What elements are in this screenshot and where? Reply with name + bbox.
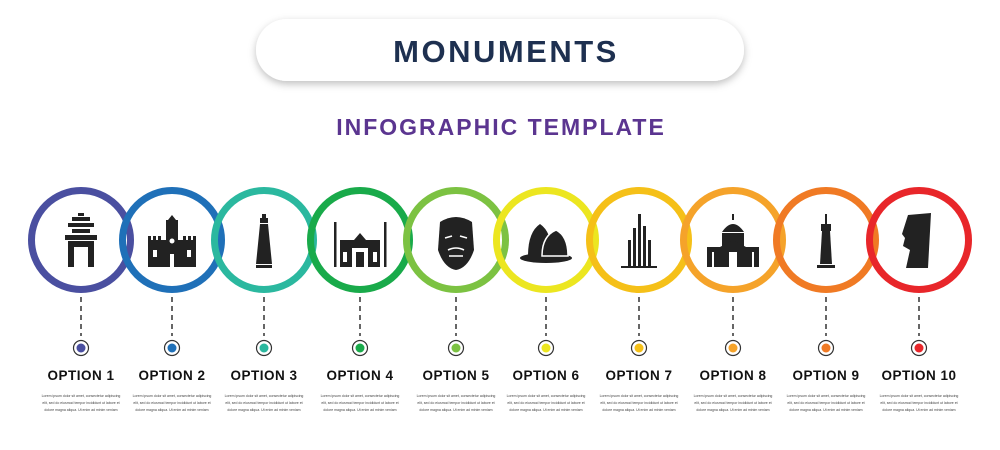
icon 4: mosque: [334, 222, 386, 267]
icon 7: towers: [621, 214, 657, 268]
descriptions: Lorem ipsum dolor sit amet, consectetur adipiscing: [133, 394, 211, 398]
descriptions: dolore magna aliqua. Ut enim ad minim veniam: [509, 408, 583, 412]
option labels: OPTION 4: [326, 368, 394, 383]
title pill: MONUMENTS: [393, 34, 619, 69]
descriptions: Lorem ipsum dolor sit amet, consectetur adipiscing: [787, 394, 865, 398]
descriptions: Lorem ipsum dolor sit amet, consectetur adipiscing: [417, 394, 495, 398]
descriptions: dolore magna aliqua. Ut enim ad minim veniam: [227, 408, 301, 412]
title pill: [256, 19, 744, 81]
descriptions: dolore magna aliqua. Ut enim ad minim veniam: [323, 408, 397, 412]
icon 6: mountains: [520, 224, 572, 263]
option labels: OPTION 7: [605, 368, 673, 383]
descriptions: Lorem ipsum dolor sit amet, consectetur adipiscing: [880, 394, 958, 398]
descriptions: dolore magna aliqua. Ut enim ad minim veniam: [882, 408, 956, 412]
icon 1: pagoda gate: [65, 213, 97, 267]
descriptions: dolore magna aliqua. Ut enim ad minim veniam: [419, 408, 493, 412]
descriptions: elit, sed do eiusmod tempor incididunt ut labore et: [321, 401, 399, 405]
descriptions: dolore magna aliqua. Ut enim ad minim veniam: [44, 408, 118, 412]
icon 5: mask: [438, 217, 474, 270]
icon 9: cn tower: [817, 214, 835, 268]
descriptions: elit, sed do eiusmod tempor incididunt ut labore et: [787, 401, 865, 405]
descriptions: elit, sed do eiusmod tempor incididunt ut labore et: [694, 401, 772, 405]
descriptions: Lorem ipsum dolor sit amet, consectetur adipiscing: [225, 394, 303, 398]
descriptions: elit, sed do eiusmod tempor incididunt ut labore et: [133, 401, 211, 405]
option labels: OPTION 1: [47, 368, 115, 383]
option labels: OPTION 6: [512, 368, 580, 383]
descriptions: elit, sed do eiusmod tempor incididunt ut labore et: [417, 401, 495, 405]
descriptions: [42, 394, 958, 412]
descriptions: Lorem ipsum dolor sit amet, consectetur adipiscing: [600, 394, 678, 398]
icon 3: obelisk: [256, 214, 272, 268]
option labels: OPTION 8: [699, 368, 767, 383]
option labels: OPTION 2: [138, 368, 206, 383]
descriptions: Lorem ipsum dolor sit amet, consectetur adipiscing: [42, 394, 120, 398]
option labels: OPTION 3: [230, 368, 298, 383]
descriptions: Lorem ipsum dolor sit amet, consectetur adipiscing: [694, 394, 772, 398]
descriptions: elit, sed do eiusmod tempor incididunt ut labore et: [507, 401, 585, 405]
option labels: [47, 368, 957, 383]
dashes and dots: [81, 297, 919, 336]
descriptions: elit, sed do eiusmod tempor incididunt ut labore et: [225, 401, 303, 405]
descriptions: dolore magna aliqua. Ut enim ad minim veniam: [135, 408, 209, 412]
descriptions: dolore magna aliqua. Ut enim ad minim veniam: [789, 408, 863, 412]
icon 10: moai: [902, 213, 931, 268]
descriptions: Lorem ipsum dolor sit amet, consectetur adipiscing: [321, 394, 399, 398]
rings: [32, 190, 968, 290]
option labels: OPTION 5: [422, 368, 490, 383]
icon 8: capitol: [707, 214, 759, 267]
descriptions: elit, sed do eiusmod tempor incididunt ut labore et: [42, 401, 120, 405]
icon 2: castle: [148, 215, 196, 267]
descriptions: elit, sed do eiusmod tempor incididunt ut labore et: [600, 401, 678, 405]
option labels: OPTION 9: [792, 368, 860, 383]
descriptions: dolore magna aliqua. Ut enim ad minim veniam: [602, 408, 676, 412]
descriptions: Lorem ipsum dolor sit amet, consectetur adipiscing: [507, 394, 585, 398]
descriptions: dolore magna aliqua. Ut enim ad minim veniam: [696, 408, 770, 412]
option labels: OPTION 10: [881, 368, 957, 383]
subtitle: INFOGRAPHIC TEMPLATE: [336, 114, 666, 140]
descriptions: elit, sed do eiusmod tempor incididunt ut labore et: [880, 401, 958, 405]
